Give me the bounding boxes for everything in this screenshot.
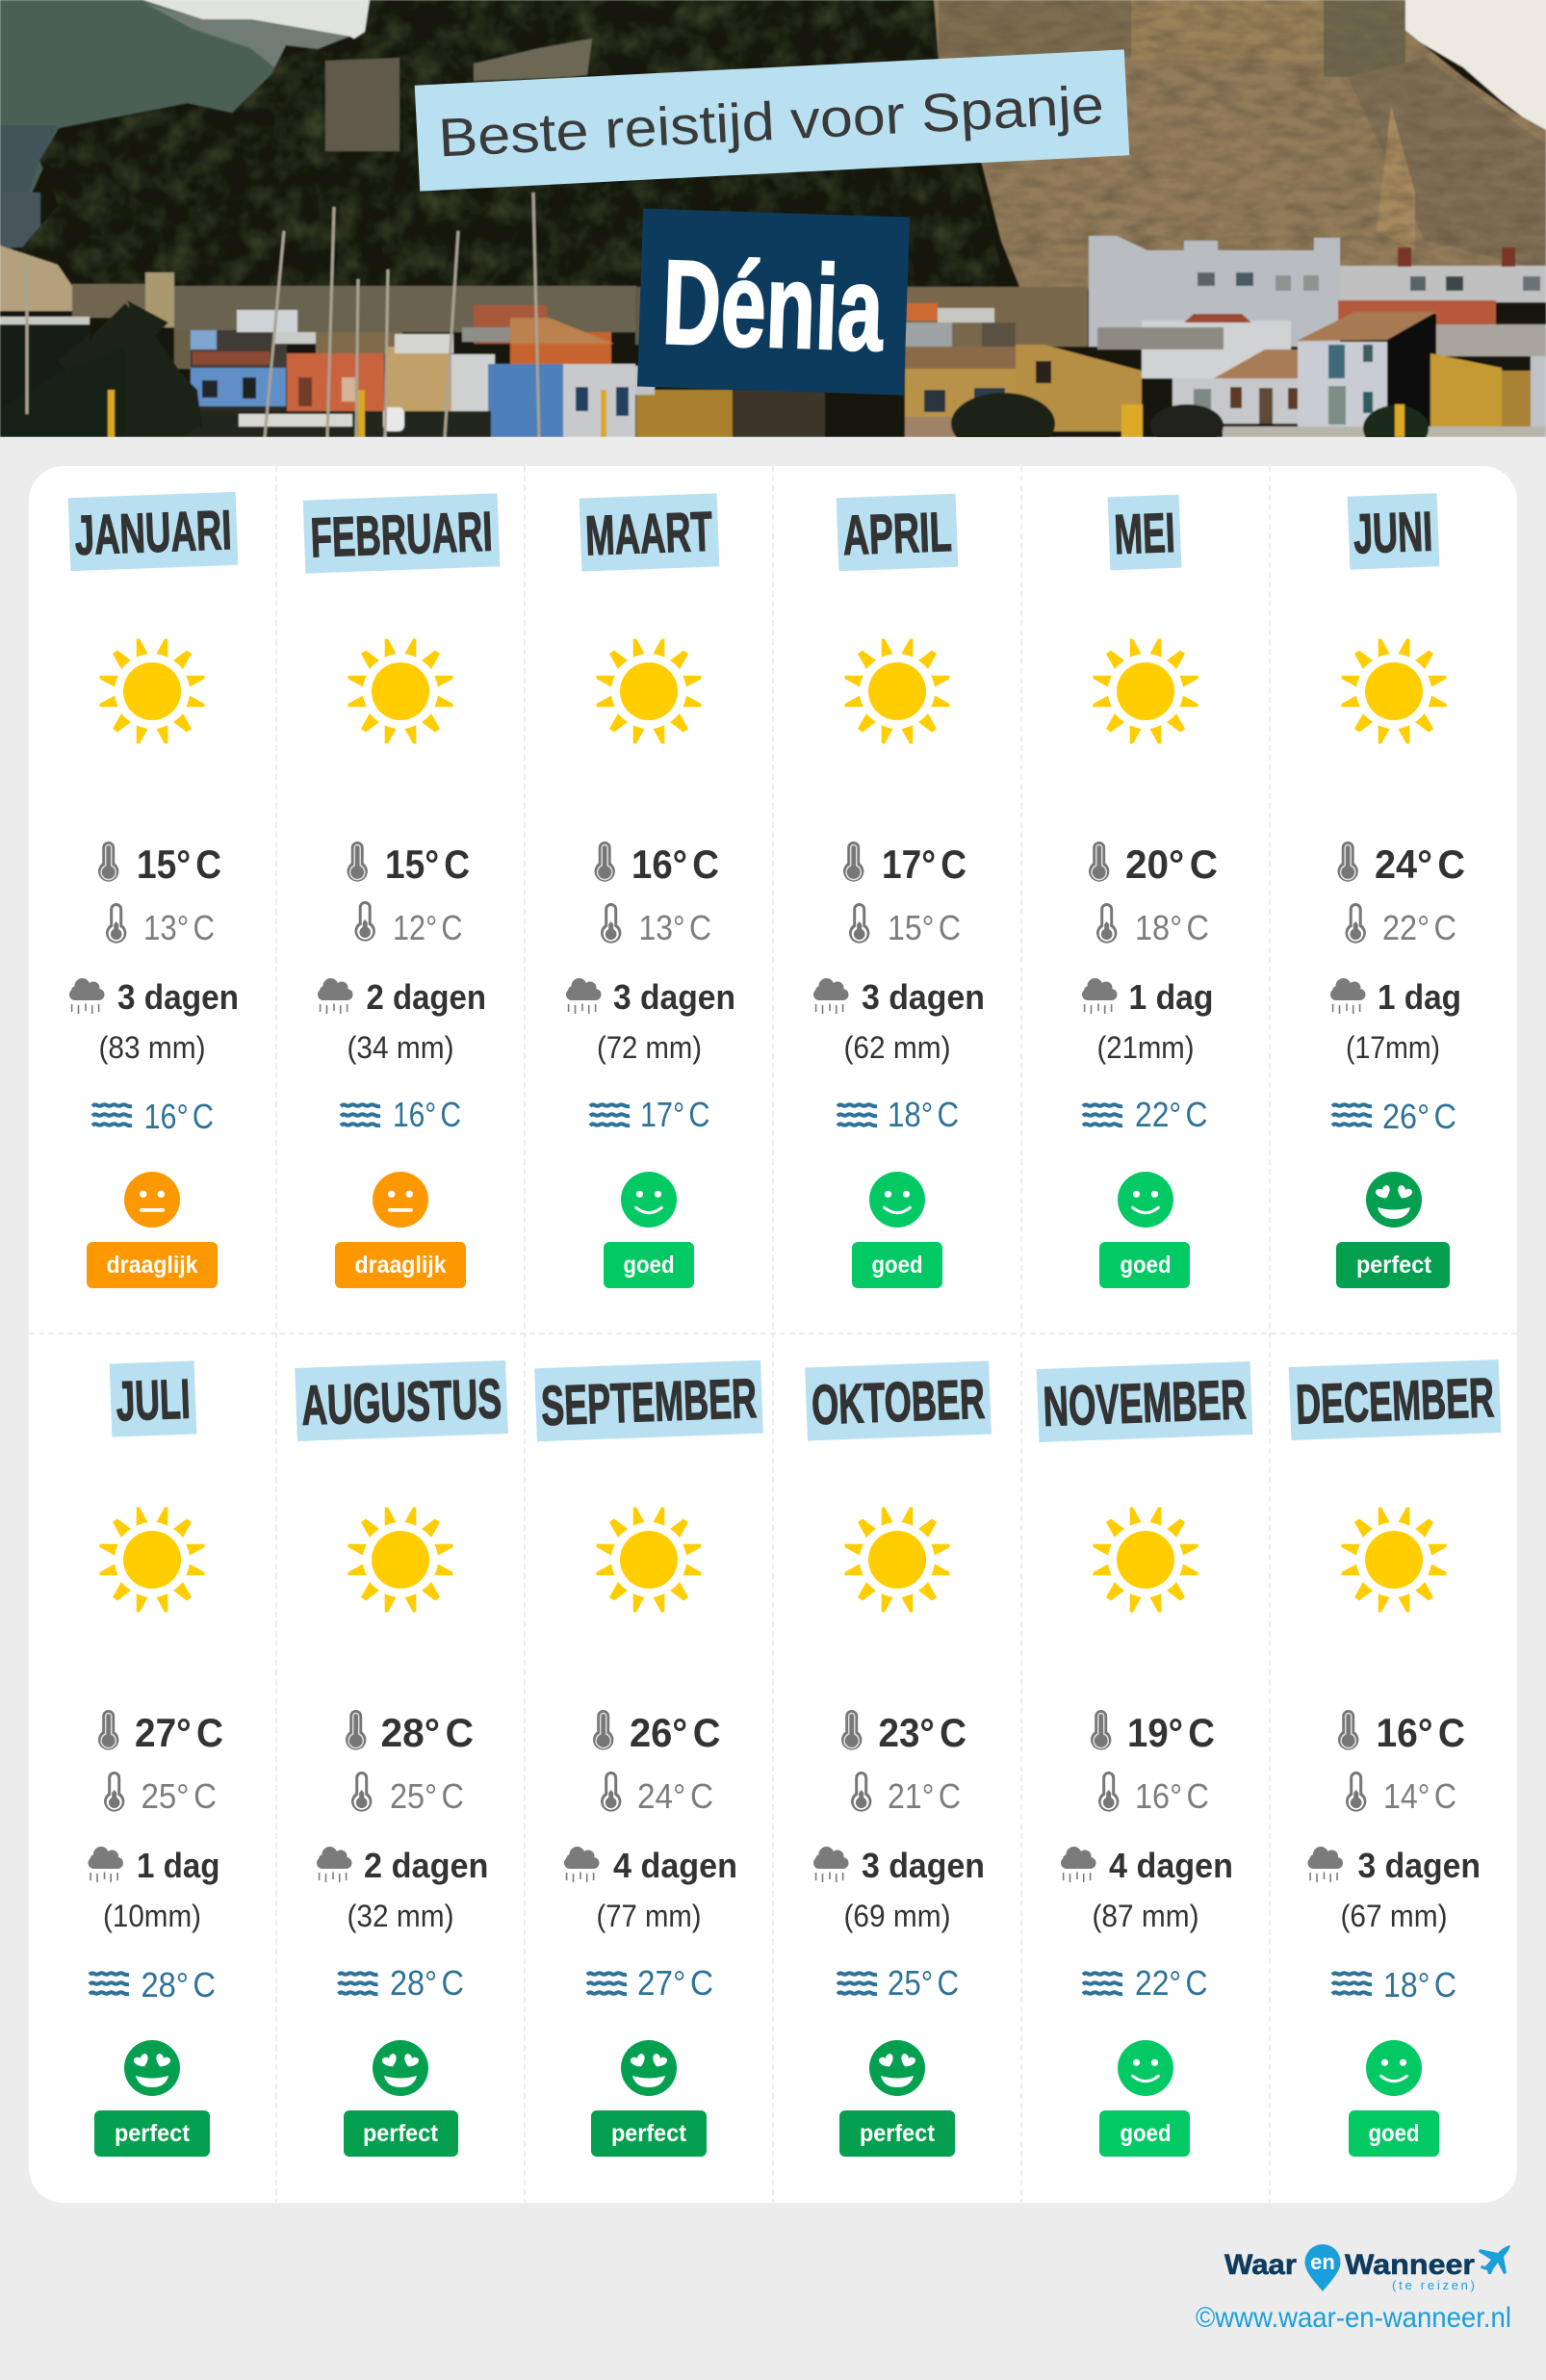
icon: sun [845, 1508, 949, 1612]
min temperature: 13° C [639, 908, 711, 947]
rain days: 1 dag [1378, 977, 1461, 1017]
rating smiley [621, 2040, 677, 2096]
rating badge: draaglijk [354, 1252, 447, 1279]
min temperature: 22° C [1382, 908, 1456, 947]
min temperature: 15° C [888, 908, 961, 947]
sea temperature: 17° C [640, 1095, 710, 1134]
rain days [564, 1846, 737, 1885]
rating smiley [1118, 1172, 1173, 1228]
sea temperature: 28° C [390, 1963, 464, 2003]
rain days [1061, 1846, 1233, 1885]
max temperature: 20° C [1125, 841, 1218, 887]
max temperature [841, 1710, 966, 1755]
month label [1037, 1361, 1252, 1442]
month label: SEPTEMBER [540, 1367, 758, 1437]
icon: sun [100, 1508, 204, 1612]
icon: sun [100, 639, 204, 743]
rainfall: (83 mm) [98, 1030, 206, 1065]
sea temperature: 28° C [141, 1965, 216, 2005]
rain days [566, 977, 735, 1017]
max temperature [1338, 841, 1465, 887]
month label [805, 1361, 992, 1440]
rating badge [591, 2110, 707, 2157]
rating smiley [621, 1172, 677, 1228]
max temperature: 17° C [882, 841, 966, 887]
min temperature [351, 1772, 464, 1816]
icon: sun [1094, 1508, 1198, 1612]
panel: juni [1330, 493, 1465, 1288]
sea temperature: 26° C [1382, 1097, 1456, 1136]
rainfall: (69 mm) [843, 1899, 951, 1933]
min temperature [849, 903, 961, 947]
rain days: 3 dagen [613, 977, 735, 1017]
icon: sun [1094, 639, 1198, 743]
sea temperature: 22° C [1135, 1963, 1207, 2003]
month label: AUGUSTUS [300, 1367, 502, 1437]
rating badge [1099, 2110, 1190, 2157]
rain days: 1 dag [1128, 977, 1213, 1017]
rating badge: goed [624, 1252, 674, 1279]
rain days: 3 dagen [117, 977, 239, 1017]
logo: Waar en Wanneer: (te reizen) [1392, 2278, 1475, 2292]
logo: Waar en Wanneer: Wanneer [1345, 2249, 1475, 2281]
max temperature [595, 841, 719, 887]
rating smiley [869, 1172, 925, 1228]
min temperature [354, 901, 462, 947]
month label [68, 492, 238, 571]
min temperature: 14° C [1383, 1776, 1456, 1816]
panel: december [1289, 1359, 1501, 2157]
rain days [317, 1846, 489, 1885]
rating smiley [124, 2040, 180, 2096]
max temperature [98, 1710, 223, 1755]
max temperature [1338, 1710, 1465, 1755]
rating badge [344, 2110, 458, 2157]
sea temperature: 18° C [1383, 1965, 1456, 2005]
rain days: 3 dagen [1357, 1846, 1481, 1885]
rating badge [335, 1242, 466, 1288]
rating smiley [373, 1172, 428, 1228]
min temperature [1098, 1772, 1209, 1816]
max temperature [1091, 1710, 1215, 1755]
max temperature: 15° C [385, 841, 470, 887]
rating badge: goed [1121, 2120, 1171, 2147]
rain days [318, 977, 486, 1017]
rain days: 4 dagen [1109, 1846, 1233, 1885]
rainfall: (77 mm) [597, 1899, 701, 1933]
sea temperature [1083, 1963, 1207, 2003]
max temperature [347, 841, 470, 887]
rating smiley [1366, 1172, 1422, 1228]
panel: oktober [805, 1361, 992, 2157]
sea temperature [90, 1965, 216, 2005]
min temperature [601, 1772, 713, 1816]
city name banner: Dénia [660, 236, 886, 376]
max temperature [1089, 841, 1218, 887]
rain days [1307, 1846, 1481, 1885]
sea temperature [587, 1963, 713, 2003]
rainfall: (10mm) [103, 1899, 201, 1933]
sea temperature [92, 1097, 214, 1136]
sea temperature: 25° C [888, 1963, 959, 2003]
panel: januari [68, 492, 239, 1288]
rain days [89, 1846, 219, 1885]
sea temperature [341, 1095, 461, 1134]
rainfall: (17mm) [1346, 1030, 1440, 1065]
title banner [415, 49, 1129, 192]
sea temperature: 27° C [637, 1963, 713, 2003]
max temperature: 23° C [878, 1710, 966, 1755]
month label [580, 493, 719, 572]
month label: JUNI [1353, 501, 1433, 565]
rating smiley [124, 1172, 180, 1228]
panel: augustus [295, 1360, 508, 2157]
rating badge: perfect [1356, 1252, 1432, 1279]
rating badge [87, 1242, 218, 1288]
icon: sun [348, 639, 452, 743]
month label: NOVEMBER [1042, 1368, 1248, 1438]
rating badge: goed [1121, 1252, 1171, 1279]
rain days [69, 977, 239, 1017]
min temperature: 24° C [637, 1776, 713, 1816]
copyright url: ©www.waar-en-wanneer.nl [1196, 2302, 1511, 2334]
rating badge [1099, 1242, 1190, 1288]
rating smiley [1118, 2040, 1173, 2096]
min temperature [851, 1772, 961, 1816]
rainfall: (62 mm) [843, 1030, 951, 1065]
rating smiley [373, 2040, 428, 2096]
rain days: 3 dagen [862, 1846, 985, 1885]
panel: juli [89, 1360, 223, 2157]
month label [1348, 493, 1439, 570]
month label: OKTOBER [811, 1368, 986, 1436]
rating smiley [869, 2040, 925, 2096]
max temperature: 16° C [631, 841, 719, 887]
rainfall: (87 mm) [1092, 1899, 1199, 1933]
month label [295, 1360, 508, 1441]
min temperature: 12° C [393, 908, 462, 947]
rating badge: goed [872, 1252, 922, 1279]
rating badge [604, 1242, 694, 1288]
rating badge: perfect [611, 2120, 687, 2147]
month label: JANUARI [73, 499, 233, 567]
min temperature: 25° C [390, 1776, 464, 1816]
max temperature: 19° C [1127, 1710, 1215, 1755]
max temperature: 26° C [630, 1710, 720, 1755]
icon: sun [348, 1508, 452, 1612]
month label [1108, 495, 1181, 570]
panel: maart [566, 493, 735, 1288]
main white card [29, 466, 1517, 2203]
rating badge [1349, 2110, 1439, 2157]
panel: november [1037, 1361, 1252, 2157]
rain days: 3 dagen [862, 977, 985, 1017]
rainfall: (32 mm) [347, 1899, 454, 1933]
rating badge [94, 2110, 210, 2157]
min temperature: 16° C [1135, 1776, 1209, 1816]
sea temperature [590, 1095, 710, 1134]
sea temperature [339, 1963, 464, 2003]
rain days [813, 1846, 985, 1885]
sea temperature [837, 1963, 959, 2003]
title banner: Beste reistijd voor Spanje [437, 74, 1105, 168]
sea temperature [1083, 1095, 1207, 1134]
min temperature [601, 903, 711, 947]
month label: MAART [584, 501, 713, 567]
min temperature: 21° C [888, 1776, 961, 1816]
rainfall: (34 mm) [347, 1030, 454, 1065]
rain days: 2 dagen [364, 1846, 489, 1885]
rating badge: perfect [363, 2120, 439, 2147]
city name banner [637, 208, 910, 396]
rain days: 1 dag [137, 1846, 219, 1885]
icon: sun [597, 1508, 701, 1612]
icon: sun [1342, 1508, 1446, 1612]
icon: airplane [1479, 2245, 1510, 2274]
min temperature: 18° C [1135, 908, 1209, 947]
rating badge [1336, 1242, 1450, 1288]
panel: mei [1082, 495, 1218, 1288]
max temperature: 24° C [1375, 841, 1465, 887]
panel: september [534, 1360, 763, 2157]
rain days: 2 dagen [366, 977, 486, 1017]
rating smiley [1366, 2040, 1422, 2096]
rating badge [852, 1242, 942, 1288]
min temperature: 25° C [141, 1776, 217, 1816]
sea temperature [837, 1095, 959, 1134]
month label [534, 1360, 763, 1441]
month label [303, 493, 500, 574]
min temperature: 13° C [143, 908, 215, 947]
icon: sun [1342, 639, 1446, 743]
panel: april [813, 494, 985, 1288]
sea temperature: 22° C [1135, 1095, 1207, 1134]
month label: FEBRUARI [309, 501, 494, 569]
min temperature [1096, 903, 1209, 947]
month label: MEI [1113, 502, 1176, 566]
rainfall: (72 mm) [597, 1030, 702, 1065]
month label: APRIL [841, 501, 953, 567]
column and row dividers [29, 466, 1517, 2203]
min temperature [1346, 903, 1456, 947]
icon: map pin [1305, 2244, 1340, 2291]
rating badge: perfect [115, 2120, 191, 2147]
icon: sun [845, 639, 949, 743]
sea temperature: 16° C [393, 1095, 461, 1134]
month label [837, 494, 958, 571]
header photo: Dénia harbour and castle [0, 0, 1546, 454]
month label: JULI [115, 1368, 192, 1433]
icon: map pin: en [1310, 2250, 1335, 2274]
max temperature: 27° C [135, 1710, 223, 1755]
month label [110, 1360, 196, 1437]
max temperature [593, 1710, 720, 1755]
sea temperature [1332, 1965, 1456, 2005]
sea temperature: 16° C [144, 1097, 214, 1136]
sea temperature [1332, 1097, 1456, 1136]
rating badge [839, 2110, 955, 2157]
max temperature: 15° C [137, 841, 221, 887]
min temperature [104, 1772, 217, 1816]
max temperature: 16° C [1377, 1710, 1465, 1755]
rating badge: perfect [860, 2120, 936, 2147]
rainfall: (21mm) [1097, 1030, 1194, 1065]
max temperature [98, 841, 221, 887]
logo: Waar en Wanneer [1224, 2244, 1510, 2292]
rain days [813, 977, 985, 1017]
max temperature: 28° C [381, 1710, 474, 1755]
logo: Waar en Wanneer: Waar [1224, 2249, 1297, 2281]
rainfall: (67 mm) [1340, 1899, 1448, 1933]
min temperature [106, 903, 215, 947]
rating badge: draaglijk [106, 1252, 198, 1279]
panel: februari [303, 493, 500, 1288]
sea temperature: 18° C [888, 1095, 959, 1134]
icon: sun [597, 639, 701, 743]
max temperature [843, 841, 966, 887]
min temperature [1346, 1772, 1456, 1816]
rating badge: goed [1369, 2120, 1419, 2147]
rain days [1330, 977, 1461, 1017]
rain days: 4 dagen [613, 1846, 737, 1885]
rain days [1082, 977, 1213, 1017]
